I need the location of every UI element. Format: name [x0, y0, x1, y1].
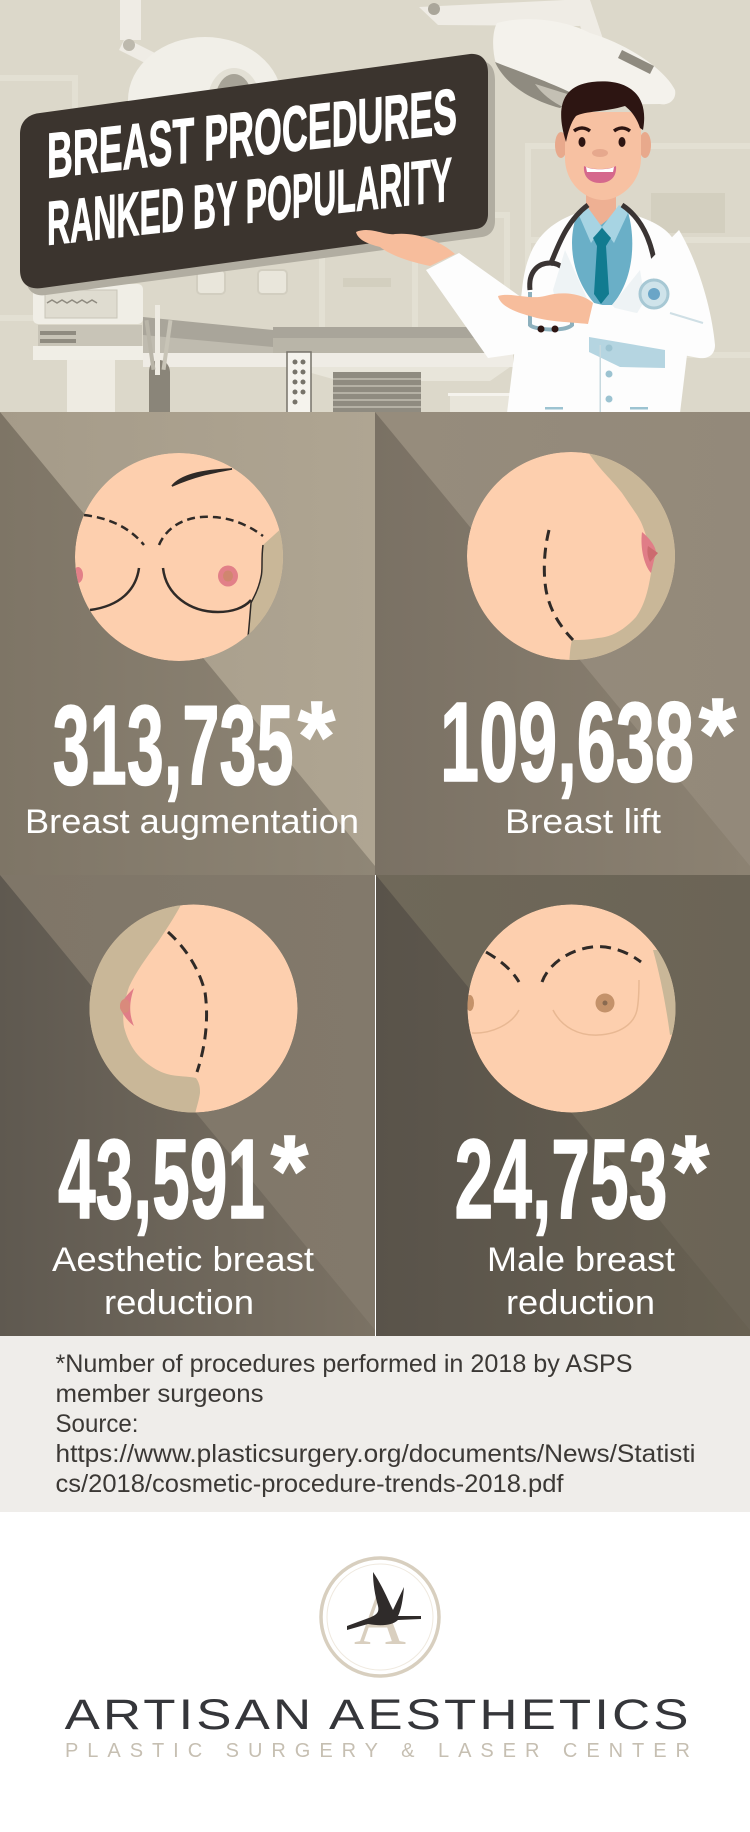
logo emblem — [321, 1558, 439, 1676]
background: wall cabinets — [0, 75, 750, 358]
doctor: ear tips — [538, 326, 558, 332]
doctor: shirt — [572, 212, 632, 305]
icon: side view breast reduction — [80, 903, 298, 1114]
doctor: eyes and brows — [574, 128, 630, 157]
icon: side view breast lift — [467, 452, 690, 664]
logo emblem: A — [354, 1580, 406, 1660]
panel: header operating room scene — [0, 0, 750, 421]
doctor: smile — [584, 166, 616, 183]
panel: aesthetic breast reduction — [0, 875, 375, 1336]
background: instrument stand — [145, 305, 172, 413]
background: operating table — [143, 317, 513, 381]
title banner — [20, 54, 495, 295]
label: male breast reduction: Male breast — [487, 1241, 676, 1279]
doctor: raised hand — [356, 230, 455, 266]
background: right surgical lamp — [419, 0, 675, 108]
footnote and source text — [56, 1350, 696, 1498]
footnote and source text: Source: — [56, 1410, 138, 1438]
doctor: right arm sleeve — [590, 230, 715, 358]
doctor illustration — [356, 81, 715, 413]
label: breast augmentation: Breast augmentation — [25, 803, 359, 841]
background: control panel — [287, 352, 311, 413]
panel: breast lift — [375, 412, 750, 875]
footnote and source text: *Number of procedures performed in 2018 by ASPS — [56, 1350, 632, 1378]
panel: male breast reduction — [376, 875, 750, 1336]
statistic: 24,753: * — [672, 1115, 709, 1227]
doctor: tie — [593, 228, 611, 304]
doctor: stethoscope — [530, 205, 656, 330]
title text — [48, 88, 456, 246]
panel: footnote — [0, 1336, 750, 1512]
statistic: 313,735 — [53, 681, 335, 808]
doctor: ears — [555, 132, 565, 158]
statistic: 43,591: * — [271, 1115, 308, 1227]
icon: male chest markings — [466, 904, 690, 1112]
logo tagline: PLASTIC SURGERY & LASER CENTER — [65, 1740, 690, 1762]
label: male breast reduction: reduction — [506, 1284, 655, 1322]
doctor: coat lapels — [553, 250, 642, 313]
label: aesthetic breast reduction — [52, 1241, 315, 1322]
background: monitor — [33, 284, 143, 413]
doctor: coat body — [507, 206, 690, 413]
doctor: hair — [561, 81, 644, 142]
footnote and source text: cs/2018/cosmetic-procedure-trends-2018.pdf — [56, 1470, 564, 1498]
label: male breast reduction — [487, 1241, 676, 1322]
label: aesthetic breast reduction: reduction — [104, 1284, 254, 1322]
doctor: collar — [578, 205, 628, 243]
statistic: 109,638: * — [699, 678, 736, 790]
doctor: neck — [586, 195, 616, 225]
footnote and source text: https://www.plasticsurgery.org/documents/News/Statisti — [56, 1440, 696, 1468]
background: left surgical lamp — [119, 0, 278, 101]
statistic: 43,591: 43,591 — [58, 1116, 265, 1242]
background: IV bags — [197, 270, 287, 294]
doctor: chest piece — [640, 280, 703, 323]
footnote and source text: member surgeons — [56, 1380, 264, 1408]
doctor: face — [565, 112, 641, 200]
logo: Artisan Aesthetics — [65, 1558, 692, 1762]
doctor: lower hand — [498, 293, 593, 324]
label: aesthetic breast reduction: Aesthetic breast — [52, 1241, 315, 1279]
panel: breast augmentation — [0, 412, 375, 875]
label: breast lift: Breast lift — [505, 803, 662, 841]
statistic: 313,735: 313,735 — [53, 682, 294, 808]
background: table base — [333, 372, 510, 412]
doctor: coat buttons — [545, 344, 648, 413]
icon: front torso with augmentation markings — [73, 453, 300, 661]
doctor: raised arm sleeve — [426, 253, 520, 358]
statistic: 313,735: * — [298, 681, 335, 793]
doctor: coat lining — [589, 337, 665, 368]
logo wordmark: ARTISAN AESTHETICS — [65, 1691, 692, 1739]
